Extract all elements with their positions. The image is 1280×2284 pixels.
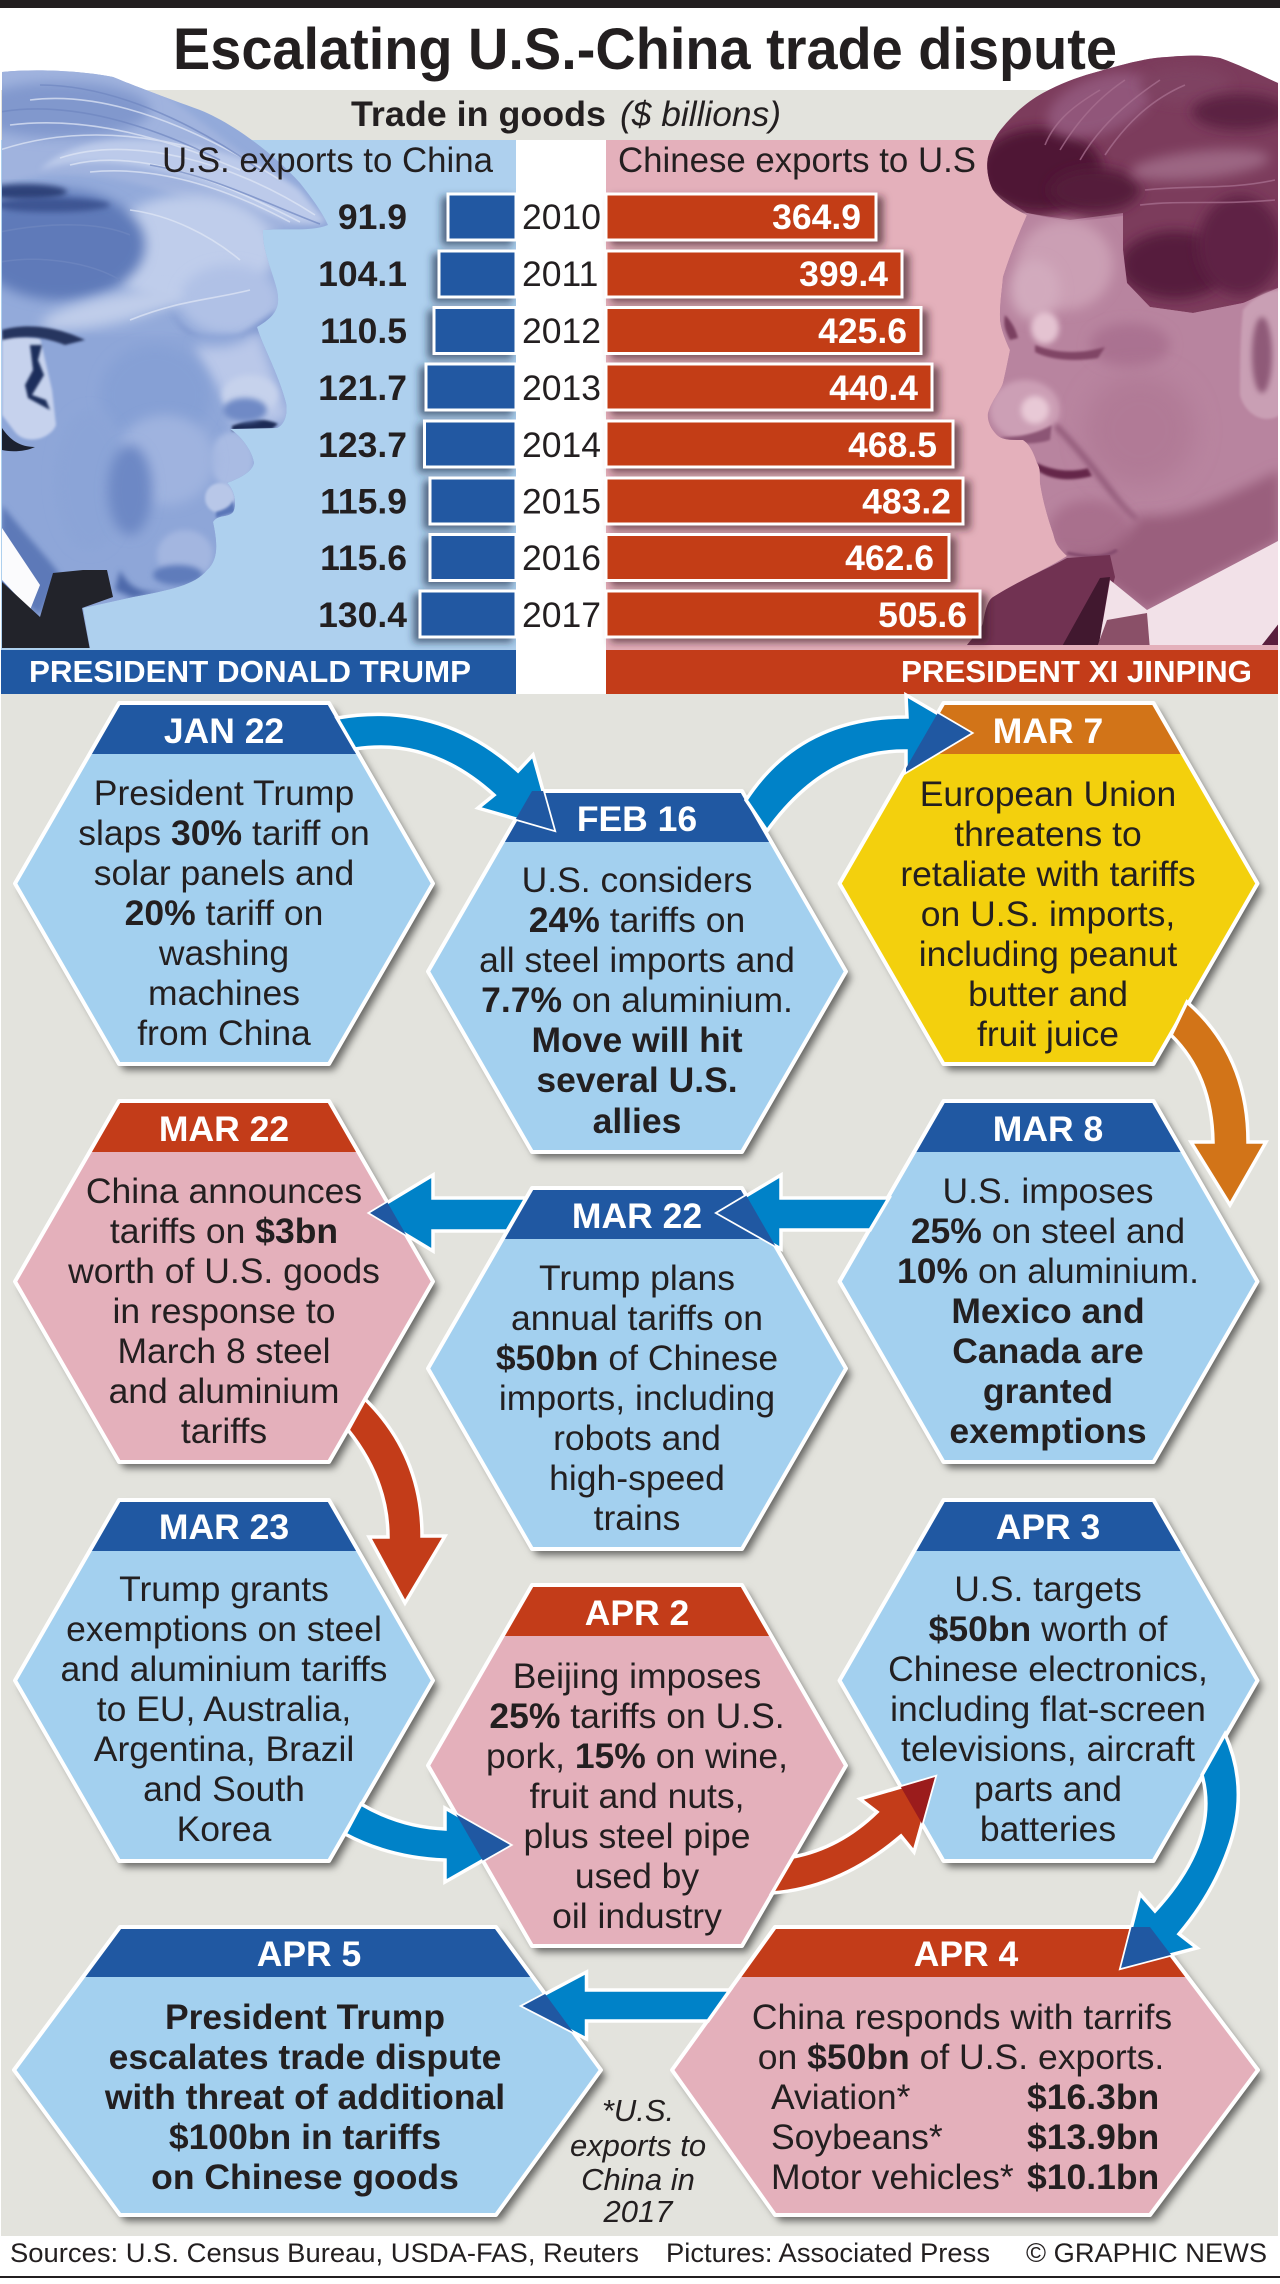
footnote: 2017	[603, 2194, 674, 2229]
footnote: China in	[581, 2162, 695, 2197]
arrow: Jan 22 to Feb 16	[337, 714, 554, 830]
event: Mar 22 (Trump plans): MAR 22	[572, 1196, 702, 1236]
event: Apr 3: $50bn worth of	[929, 1609, 1168, 1649]
event: Apr 4: APR 4	[914, 1934, 1019, 1974]
event: Feb 16: U.S. considers	[522, 860, 752, 900]
event: Jan 22: machines	[148, 973, 300, 1013]
event: Mar 7 (EU): MAR 7	[993, 711, 1103, 751]
top rule	[0, 0, 1280, 8]
arrow: Apr 4 to Apr 5	[522, 1972, 730, 2039]
footnote: *U.S.	[602, 2093, 674, 2128]
arrow: Mar 22 to Mar 23	[348, 1399, 445, 1603]
event: Apr 4: $10.1bn	[1027, 2157, 1159, 2197]
event: Apr 4: China responds with tarrifs	[752, 1997, 1172, 2037]
event: Mar 7 (EU): European Union	[920, 774, 1176, 814]
event: Apr 5: with threat of additional	[104, 2077, 505, 2117]
event: Mar 22 (China announces): MAR 22	[159, 1109, 289, 1149]
event: Mar 8	[840, 1101, 1258, 1462]
bar chart: U.S. exports to China: 121.7	[318, 368, 407, 408]
event: Mar 23: Trump grants	[119, 1569, 329, 1609]
year labels: 2010	[522, 197, 601, 237]
forehead fold and eye	[178, 310, 275, 336]
event: Apr 3: Chinese electronics,	[888, 1649, 1208, 1689]
event: Apr 4: on $50bn of U.S. exports.	[758, 2037, 1164, 2077]
event: Apr 5: $100bn in tariffs	[169, 2117, 441, 2157]
event: Apr 3: including flat-screen	[890, 1689, 1206, 1729]
event: Feb 16	[428, 791, 846, 1152]
event: Jan 22: JAN 22	[164, 711, 284, 751]
event: Apr 3: U.S. targets	[954, 1569, 1142, 1609]
event: Jan 22: 20% tariff on	[125, 893, 323, 933]
year labels: 2015	[522, 482, 601, 522]
timeline background	[1, 694, 1278, 2236]
bar chart: Chinese exports to U.S.: 462.6	[845, 538, 934, 578]
event: Jan 22: President Trump	[94, 773, 354, 813]
arrow: Apr 2 to Apr 3	[772, 1777, 935, 1893]
event: Apr 5: escalates trade dispute	[109, 2037, 501, 2077]
hair tones	[978, 53, 1280, 313]
hair streaks	[0, 98, 315, 320]
bar chart: U.S. exports to China	[318, 194, 516, 637]
footnote	[570, 2093, 706, 2229]
year labels	[522, 197, 601, 635]
white spine behind year labels	[516, 140, 606, 694]
event: Jan 22: washing	[158, 933, 289, 973]
event: Apr 5: on Chinese goods	[151, 2157, 459, 2197]
event: Mar 7 (EU)	[840, 703, 1258, 1064]
footer: sources and credits: Pictures: Associated Press	[666, 2238, 990, 2268]
event: Mar 8: exemptions	[949, 1411, 1147, 1451]
suit, shirt and tie	[960, 555, 1115, 650]
event: Apr 3: parts and	[974, 1769, 1122, 1809]
bar chart: U.S. exports to China: 104.1	[318, 254, 407, 294]
ear	[2, 335, 56, 439]
bar chart: Chinese exports to U.S.: 425.6	[818, 311, 907, 351]
event: Apr 4: $16.3bn	[1027, 2077, 1159, 2117]
year labels: 2012	[522, 311, 601, 351]
event: Feb 16: several U.S.	[536, 1060, 738, 1100]
event: Mar 22 (Trump plans): annual tariffs on	[511, 1298, 763, 1338]
bar chart: U.S. exports to China: 123.7	[318, 425, 407, 465]
event: Mar 8: 25% on steel and	[911, 1211, 1185, 1251]
arrow: Apr 3 to Apr 4	[1121, 1734, 1238, 1968]
footer: sources and credits	[10, 2238, 1267, 2268]
event: Apr 2: plus steel pipe	[524, 1816, 750, 1856]
event: Apr 2: pork, 15% on wine,	[486, 1736, 788, 1776]
event: Apr 3: televisions, aircraft	[901, 1729, 1195, 1769]
face tones	[990, 212, 1278, 522]
bar chart: U.S. exports to China: 91.9	[338, 197, 407, 237]
event: Mar 23: Argentina, Brazil	[94, 1729, 354, 1769]
year labels: 2017	[522, 595, 601, 635]
event: Mar 22 (China announces): and aluminium	[109, 1371, 339, 1411]
event: Apr 5	[14, 1927, 601, 2215]
photo: President Xi profile	[960, 50, 1280, 650]
event: Apr 4: Motor vehicles*	[771, 2157, 1014, 2197]
year labels: 2013	[522, 368, 601, 408]
event: Mar 7 (EU): on U.S. imports,	[921, 894, 1175, 934]
panel: Chinese exports background	[606, 140, 1278, 652]
name band: Xi: PRESIDENT XI JINPING	[901, 654, 1252, 689]
event: Jan 22: solar panels and	[94, 853, 354, 893]
arrow: Mar 7 to Mar 8	[1171, 1002, 1266, 1205]
event: Apr 2: used by	[575, 1856, 699, 1896]
arrow: Mar 8 to Mar 22	[718, 1175, 889, 1249]
column heading: U.S. exports: U.S. exports to China	[162, 140, 493, 180]
bar chart: U.S. exports to China: 110.5	[320, 311, 407, 351]
event: Mar 7 (EU): retaliate with tariffs	[900, 854, 1196, 894]
title: Escalating U.S.-China trade dispute	[173, 17, 1117, 82]
name band: Xi	[606, 650, 1278, 694]
name band: Trump: PRESIDENT DONALD TRUMP	[29, 654, 471, 689]
footnote: exports to	[570, 2128, 706, 2163]
event: Mar 22 (Trump plans): Trump plans	[539, 1258, 735, 1298]
event: Mar 23: MAR 23	[159, 1507, 289, 1547]
column heading: Chinese exports: Chinese exports to U.S	[618, 140, 976, 180]
event: Jan 22: slaps 30% tariff on	[78, 813, 370, 853]
panel: U.S. exports background	[1, 140, 516, 652]
event: Jan 22	[15, 703, 433, 1064]
event: Mar 22 (Trump plans): $50bn of Chinese	[496, 1338, 778, 1378]
event: Mar 22 (China announces): tariffs on $3bn	[110, 1211, 338, 1251]
bar chart: Chinese exports to U.S.: 483.2	[862, 482, 951, 522]
photo: President Trump profile	[0, 60, 340, 660]
arrow: Mar 23 to Apr 2	[345, 1804, 510, 1882]
event: Apr 4: Soybeans*	[771, 2117, 943, 2157]
event: Mar 22 (Trump plans): high-speed	[549, 1458, 725, 1498]
chart heading: trade in goods	[351, 94, 781, 134]
event: Mar 22 (China announces)	[15, 1101, 433, 1462]
bar chart: U.S. exports to China: 115.6	[320, 538, 407, 578]
event: Mar 22 (China announces): worth of U.S. goods	[67, 1251, 380, 1291]
event: Feb 16: FEB 16	[577, 799, 697, 839]
event: Apr 2: Beijing imposes	[513, 1656, 761, 1696]
event: Apr 3	[840, 1500, 1258, 1861]
bar chart: Chinese exports to U.S.: 440.4	[829, 368, 918, 408]
event: Mar 8: U.S. imposes	[942, 1171, 1154, 1211]
event: Mar 8: Mexico and	[951, 1291, 1145, 1331]
event: Apr 3: APR 3	[996, 1507, 1100, 1547]
event: Apr 5: President Trump	[165, 1997, 445, 2037]
year labels: 2014	[522, 425, 601, 465]
hair tones	[0, 60, 330, 338]
event: Mar 22 (China announces): March 8 steel	[117, 1331, 331, 1371]
bar chart: U.S. exports to China: 130.4	[318, 595, 407, 635]
event: Apr 2: APR 2	[585, 1593, 689, 1633]
event: Mar 22 (Trump plans): imports, including	[499, 1378, 775, 1418]
nostril	[232, 420, 278, 431]
event: Apr 2: fruit and nuts,	[529, 1776, 745, 1816]
year labels: 2011	[522, 254, 598, 294]
arrow: Mar 22 to China's Mar 22	[370, 1175, 526, 1251]
event: Apr 4: Aviation*	[771, 2077, 911, 2117]
bar chart: Chinese exports to U.S.: 468.5	[848, 425, 937, 465]
event: Mar 23: to EU, Australia,	[97, 1689, 351, 1729]
event: Mar 8: MAR 8	[993, 1109, 1103, 1149]
bar chart: Chinese exports to U.S.	[606, 194, 980, 637]
background band: trade heading strip	[1, 90, 1278, 140]
event: Mar 8: granted	[983, 1371, 1113, 1411]
arrow: Feb 16 to Mar 7	[746, 695, 971, 831]
chart heading: trade in goods: ($ billions)	[620, 94, 781, 134]
event: Feb 16: 24% tariffs on	[529, 900, 745, 940]
event: Mar 23: and aluminium tariffs	[61, 1649, 387, 1689]
chart heading: trade in goods: Trade in goods	[351, 94, 606, 134]
event: Mar 23	[15, 1500, 433, 1861]
event: Mar 7 (EU): threatens to	[954, 814, 1142, 854]
event: Mar 22 (China announces): tariffs	[181, 1411, 267, 1451]
event: Feb 16: all steel imports and	[479, 940, 795, 980]
event: Mar 7 (EU): fruit juice	[977, 1014, 1119, 1054]
event: Feb 16: allies	[593, 1101, 681, 1141]
event: Jan 22: from China	[137, 1013, 311, 1053]
event: Apr 4: $13.9bn	[1027, 2117, 1159, 2157]
bar chart: Chinese exports to U.S.: 364.9	[772, 197, 861, 237]
year labels: 2016	[522, 538, 601, 578]
bar chart: U.S. exports to China: 115.9	[320, 482, 407, 522]
event: Apr 5: APR 5	[257, 1934, 361, 1974]
event: Mar 23: Korea	[177, 1809, 272, 1849]
collar and suit	[2, 528, 40, 610]
event: Mar 7 (EU): butter and	[968, 974, 1128, 1014]
bar chart: Chinese exports to U.S.: 505.6	[878, 595, 967, 635]
event: Feb 16: Move will hit	[531, 1020, 743, 1060]
name band: Trump	[1, 650, 516, 694]
event: Mar 22 (Trump plans)	[428, 1188, 846, 1549]
event: Mar 22 (Trump plans): trains	[594, 1498, 680, 1538]
face tones	[83, 334, 286, 613]
event: Mar 22 (Trump plans): robots and	[553, 1418, 721, 1458]
ear	[1240, 290, 1280, 419]
event: Mar 23: exemptions on steel	[66, 1609, 382, 1649]
event: Apr 2: 25% tariffs on U.S.	[489, 1696, 785, 1736]
footer: sources and credits: © GRAPHIC NEWS	[1026, 2238, 1267, 2268]
event: Apr 2	[428, 1585, 846, 1946]
event: Apr 2: oil industry	[552, 1896, 722, 1936]
event: Apr 4	[672, 1927, 1258, 2215]
event: Mar 7 (EU): including peanut	[919, 934, 1177, 974]
event: Feb 16: 7.7% on aluminium.	[481, 980, 793, 1020]
bar chart: Chinese exports to U.S.: 399.4	[799, 254, 888, 294]
footer: sources and credits: Sources: U.S. Census Bureau, USDA-FAS, Reuters	[10, 2238, 639, 2268]
event: Mar 8: Canada are	[952, 1331, 1144, 1371]
event: Apr 3: batteries	[980, 1809, 1116, 1849]
event: Mar 23: and South	[143, 1769, 305, 1809]
event: Mar 22 (China announces): China announces	[86, 1171, 362, 1211]
pink strip under Xi photo	[960, 645, 1278, 651]
event: Mar 22 (China announces): in response to	[112, 1291, 336, 1331]
event: Mar 8: 10% on aluminium.	[897, 1251, 1199, 1291]
